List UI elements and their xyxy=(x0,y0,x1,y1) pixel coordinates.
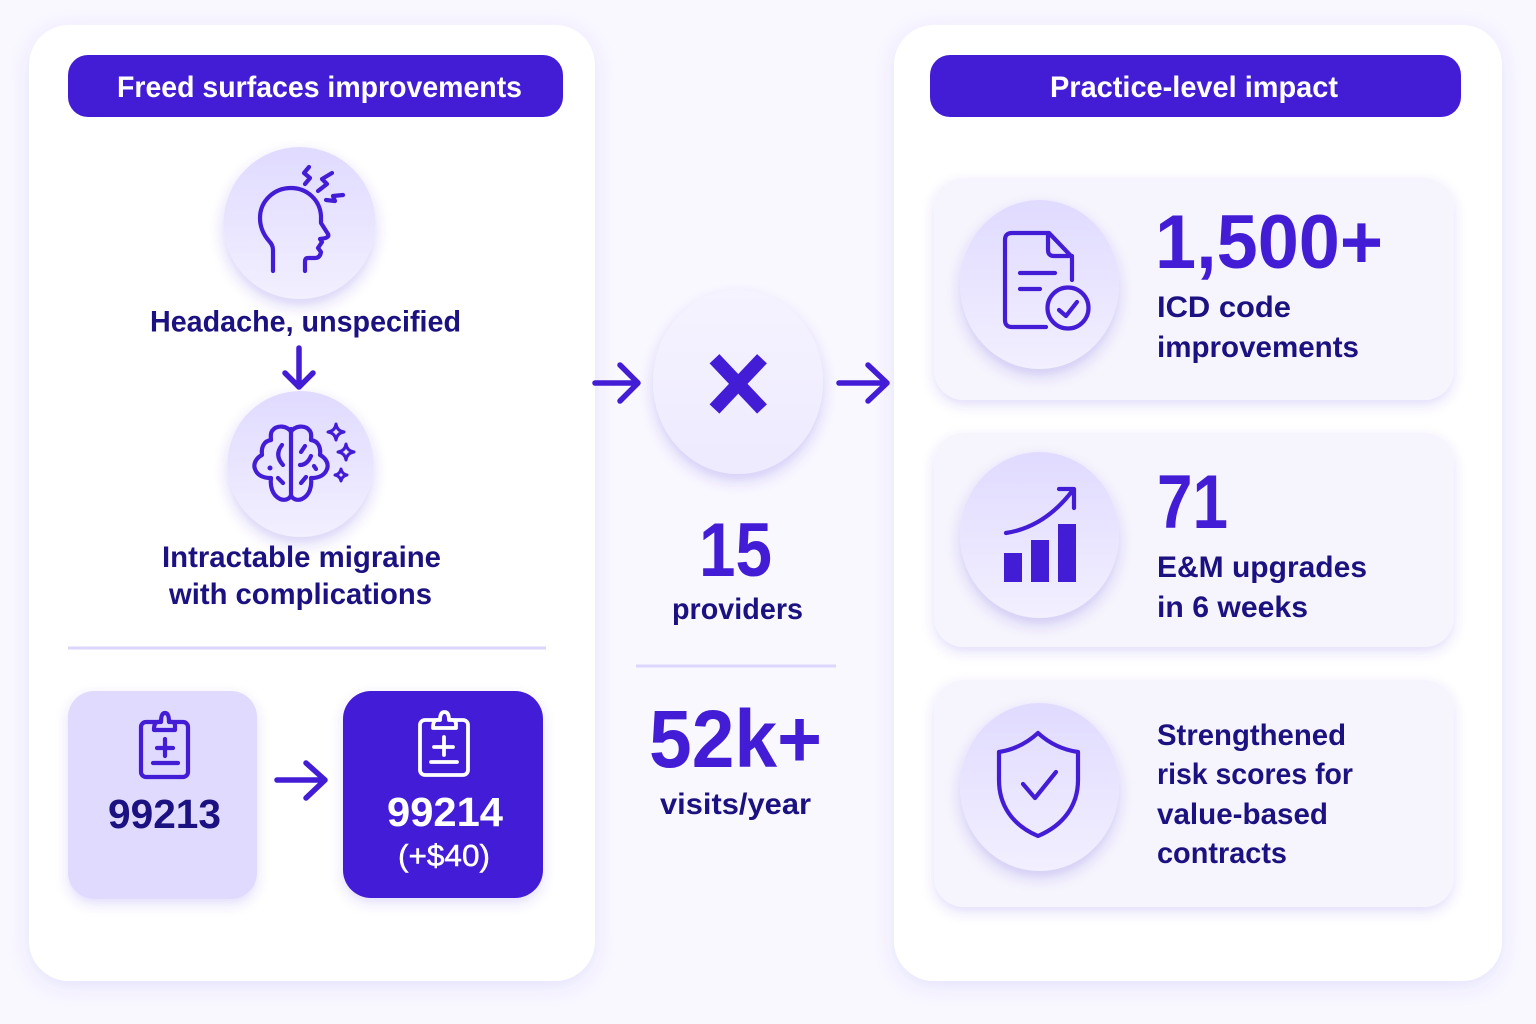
text: risk scores: Strengthened xyxy=(1157,719,1346,752)
card: code 99213 xyxy=(68,691,257,899)
icon: document check xyxy=(960,200,1119,369)
arrow: to impact xyxy=(839,365,887,401)
icon: brain with sparkles xyxy=(228,391,374,537)
arrow: down xyxy=(285,348,313,387)
panel: Freed surfaces improvements xyxy=(29,25,595,981)
card: code 99214: 99214 xyxy=(387,789,503,835)
icon: multiply circle xyxy=(653,290,823,474)
card: ICD code improvements: improvements xyxy=(1157,331,1359,364)
icon: clipboard xyxy=(141,713,188,777)
card: code 99214: (+$40) xyxy=(398,838,490,873)
card: code 99213: 99213 xyxy=(108,791,221,837)
text: risk scores: risk scores for xyxy=(1157,758,1353,791)
label: Intractable migraine with complications xyxy=(162,541,441,611)
card: E&M upgrades: 71 xyxy=(1157,460,1228,545)
heading: Freed surfaces improvements xyxy=(68,55,563,117)
arrow: 99213 to 99214 xyxy=(277,763,325,798)
stat: 15 providers xyxy=(672,508,803,626)
heading: Practice-level impact: Practice-level impact xyxy=(1050,71,1338,104)
label: Intractable migraine with complications: with complications xyxy=(168,578,432,611)
arrow: to multiplier xyxy=(595,365,638,401)
stat: 52k+ visits/year xyxy=(649,694,822,821)
stat: 52k+ visits/year: 52k+ xyxy=(649,694,822,785)
card: ICD code improvements: 1,500+ xyxy=(1155,200,1383,285)
icon: clipboard white xyxy=(420,712,468,775)
card: E&M upgrades: E&M upgrades xyxy=(1157,551,1367,584)
stat: 15 providers: providers xyxy=(672,593,803,626)
stat: 15 providers: 15 xyxy=(699,508,772,593)
label: Intractable migraine with complications: Intractable migraine xyxy=(162,541,441,574)
panel: Practice-level impact xyxy=(894,25,1502,981)
icon: rising bar chart xyxy=(960,452,1119,618)
card: strengthened risk scores xyxy=(934,680,1454,907)
label: Headache, unspecified: Headache, unspecified xyxy=(150,306,461,338)
card: E&M upgrades xyxy=(934,433,1454,647)
heading: Practice-level impact xyxy=(930,55,1461,117)
stat: 52k+ visits/year: visits/year xyxy=(660,788,811,821)
card: E&M upgrades: in 6 weeks xyxy=(1157,591,1308,624)
card: ICD code improvements xyxy=(934,178,1454,400)
heading: Freed surfaces improvements: Freed surfaces improvements xyxy=(117,71,522,104)
card: ICD code improvements: ICD code xyxy=(1157,291,1291,324)
text: risk scores: value-based xyxy=(1157,798,1328,831)
icon: shield check xyxy=(960,703,1119,871)
card: code 99214 xyxy=(343,691,543,898)
text: risk scores: contracts xyxy=(1157,837,1287,870)
icon: head with headache xyxy=(224,147,376,299)
text: risk scores xyxy=(1157,719,1353,870)
